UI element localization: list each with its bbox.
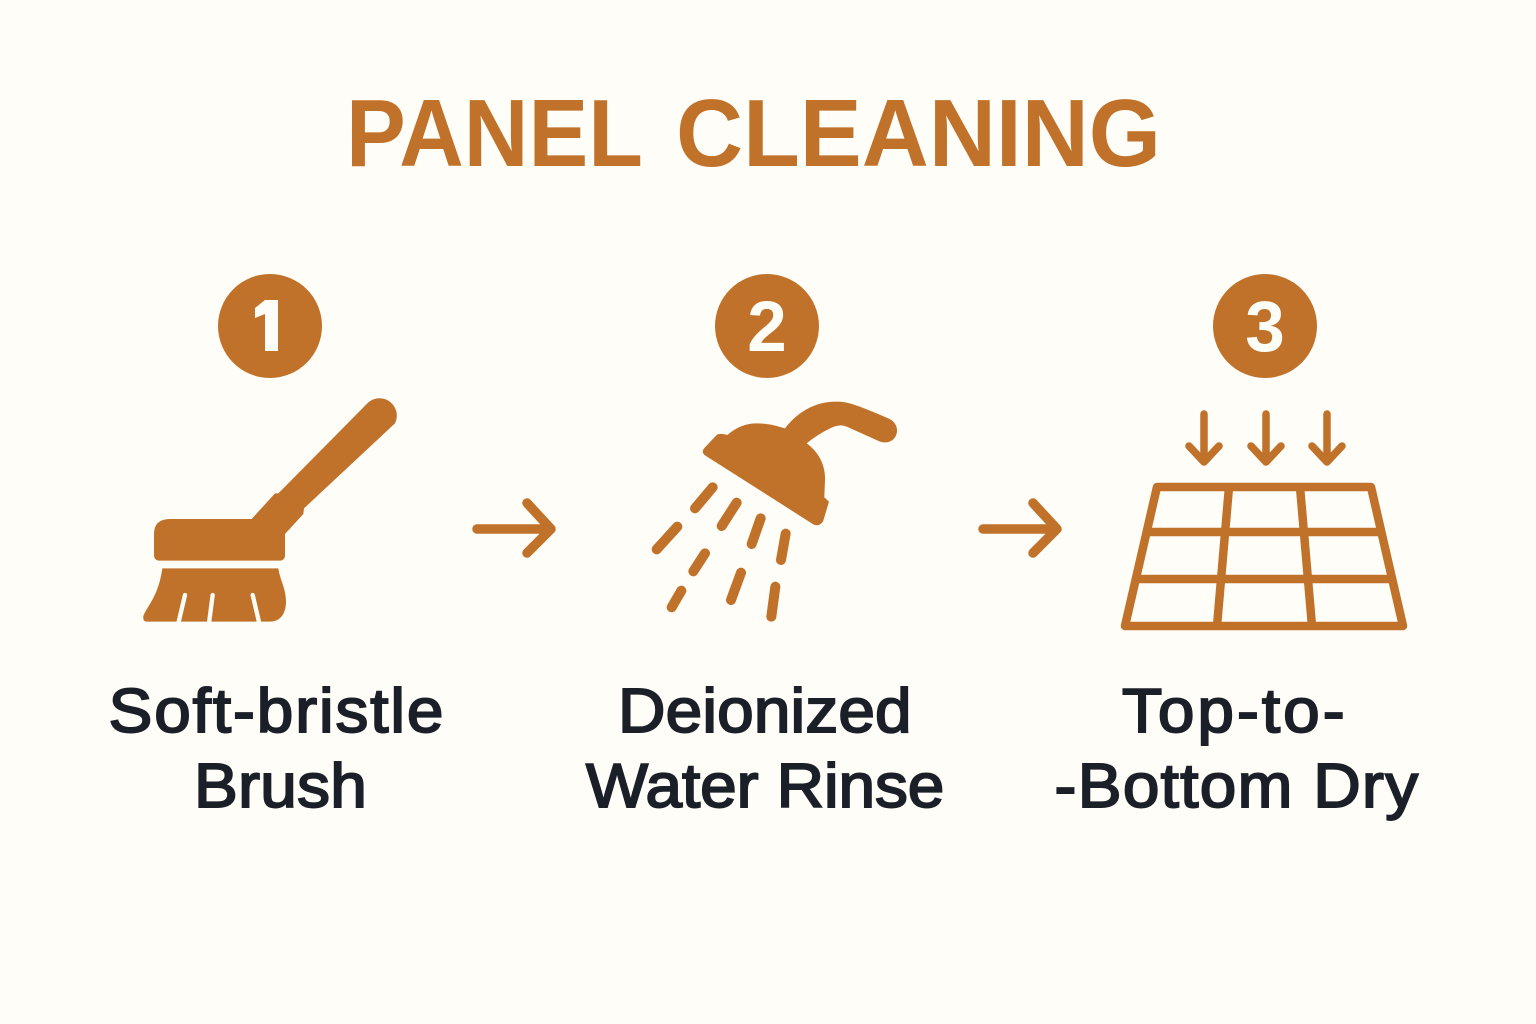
title: CLEANING	[676, 80, 1161, 187]
label: Top-to-Bottom Dry: Top-to-	[1122, 676, 1345, 746]
number badge 2	[715, 274, 819, 378]
label: Top-to-Bottom Dry	[1054, 676, 1418, 821]
icon: solar panel grid	[1125, 487, 1403, 626]
number badge 3	[1213, 274, 1317, 378]
label: Deionized Water Rinse: Deionized	[618, 676, 912, 746]
label: Top-to-Bottom Dry: -Bottom Dry	[1054, 751, 1418, 821]
arrow: step 2 to step 3	[983, 503, 1057, 553]
title: PANEL	[346, 80, 643, 187]
number badge 1	[218, 274, 322, 378]
title	[346, 80, 1161, 187]
panel: step 1 soft-bristle brush	[108, 274, 443, 821]
icon: brush	[143, 398, 397, 623]
arrow: step 1 to step 2	[477, 503, 551, 553]
label: Deionized Water Rinse	[586, 676, 944, 821]
label: Soft-bristle Brush	[108, 676, 443, 821]
icon: shower head	[657, 402, 897, 617]
number badge 2: 2	[747, 288, 787, 367]
label: Deionized Water Rinse: Water Rinse	[586, 751, 944, 821]
label: Soft-bristle Brush: Soft-bristle	[108, 676, 443, 746]
panel: step 3 top-to-bottom dry	[1054, 274, 1418, 821]
panel: step 2 deionized water rinse	[586, 274, 944, 821]
number badge 3: 3	[1245, 288, 1285, 367]
icon: down arrows	[1189, 414, 1342, 462]
label: Soft-bristle Brush: Brush	[194, 751, 367, 821]
number badge 1: 1	[250, 288, 290, 367]
